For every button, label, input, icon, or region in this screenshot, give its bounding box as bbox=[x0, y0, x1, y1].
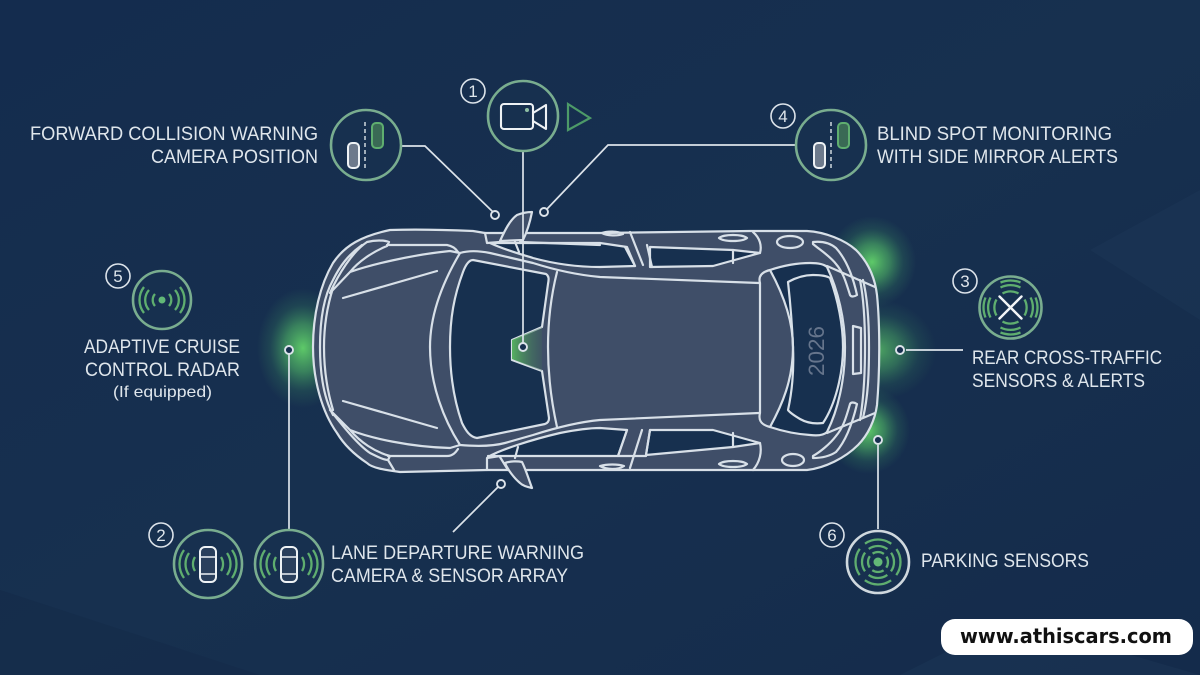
callout 3: rear cross-traffic: SENSORS & ALERTS bbox=[972, 371, 1145, 392]
callout: forward collision warning: CAMERA POSITION bbox=[151, 147, 318, 168]
side mirror top bbox=[500, 212, 532, 241]
icon: car with waves right bbox=[260, 547, 318, 582]
icon: car with waves left bbox=[179, 547, 237, 582]
callout 5: adaptive cruise: (If equipped) bbox=[113, 384, 212, 401]
callout 1: camera: 1 bbox=[468, 82, 478, 101]
callout 2: lane departure: CAMERA & SENSOR ARRAY bbox=[331, 566, 568, 587]
connector lines bbox=[285, 145, 963, 532]
website badge bbox=[941, 619, 1193, 655]
car body bbox=[313, 230, 879, 472]
callout: forward collision warning: FORWARD COLLISION WARNING bbox=[30, 124, 318, 145]
side windows bbox=[490, 243, 635, 267]
icon: parking waves bbox=[856, 540, 900, 584]
callout 2: lane departure: LANE DEPARTURE WARNING bbox=[331, 543, 584, 564]
rear plate slot bbox=[853, 326, 861, 374]
callout 4: blind spot: WITH SIDE MIRROR ALERTS bbox=[877, 147, 1118, 168]
headlights and hood lines bbox=[320, 240, 460, 470]
callout: forward collision warning bbox=[30, 110, 401, 180]
callout 6: parking sensors: PARKING SENSORS bbox=[921, 551, 1089, 572]
callout 2: lane departure: 2 bbox=[156, 526, 166, 545]
callout 5: adaptive cruise bbox=[84, 264, 240, 401]
roof panel and body lines bbox=[430, 233, 759, 470]
callout 4: blind spot: 4 bbox=[778, 107, 788, 126]
callout 4: blind spot bbox=[771, 104, 1118, 180]
callout 4: blind spot: BLIND SPOT MONITORING bbox=[877, 124, 1112, 145]
callout 5: adaptive cruise: CONTROL RADAR bbox=[85, 360, 240, 381]
callout 1: camera bbox=[461, 79, 590, 151]
website badge: www.athiscars.com bbox=[960, 624, 1172, 648]
callout 2: lane departure bbox=[149, 523, 584, 598]
callout 6: parking sensors: 6 bbox=[827, 526, 837, 545]
windshield bbox=[450, 260, 549, 438]
callout 3: rear cross-traffic bbox=[953, 269, 1162, 392]
taillights bbox=[813, 242, 857, 458]
sensor glows bbox=[257, 216, 936, 474]
callout 5: adaptive cruise: ADAPTIVE CRUISE bbox=[84, 337, 240, 358]
icon: radar waves bbox=[139, 287, 185, 313]
door handles and caps bbox=[600, 232, 747, 469]
icon: video camera bbox=[501, 104, 546, 129]
callout 3: rear cross-traffic: 3 bbox=[960, 272, 970, 291]
side mirror bottom bbox=[505, 461, 532, 488]
icon: lane cars bbox=[348, 122, 383, 170]
callout 5: adaptive cruise: 5 bbox=[113, 267, 123, 286]
callout 6: parking sensors bbox=[820, 523, 1089, 593]
year marking: 2026 bbox=[804, 326, 829, 376]
car top view bbox=[313, 212, 879, 488]
icon: blind spot cars bbox=[814, 122, 849, 170]
icon: cross-traffic waves bbox=[984, 281, 1037, 334]
callout 3: rear cross-traffic: REAR CROSS-TRAFFIC bbox=[972, 348, 1162, 369]
camera mount bbox=[512, 327, 542, 371]
rear window bbox=[770, 263, 845, 435]
